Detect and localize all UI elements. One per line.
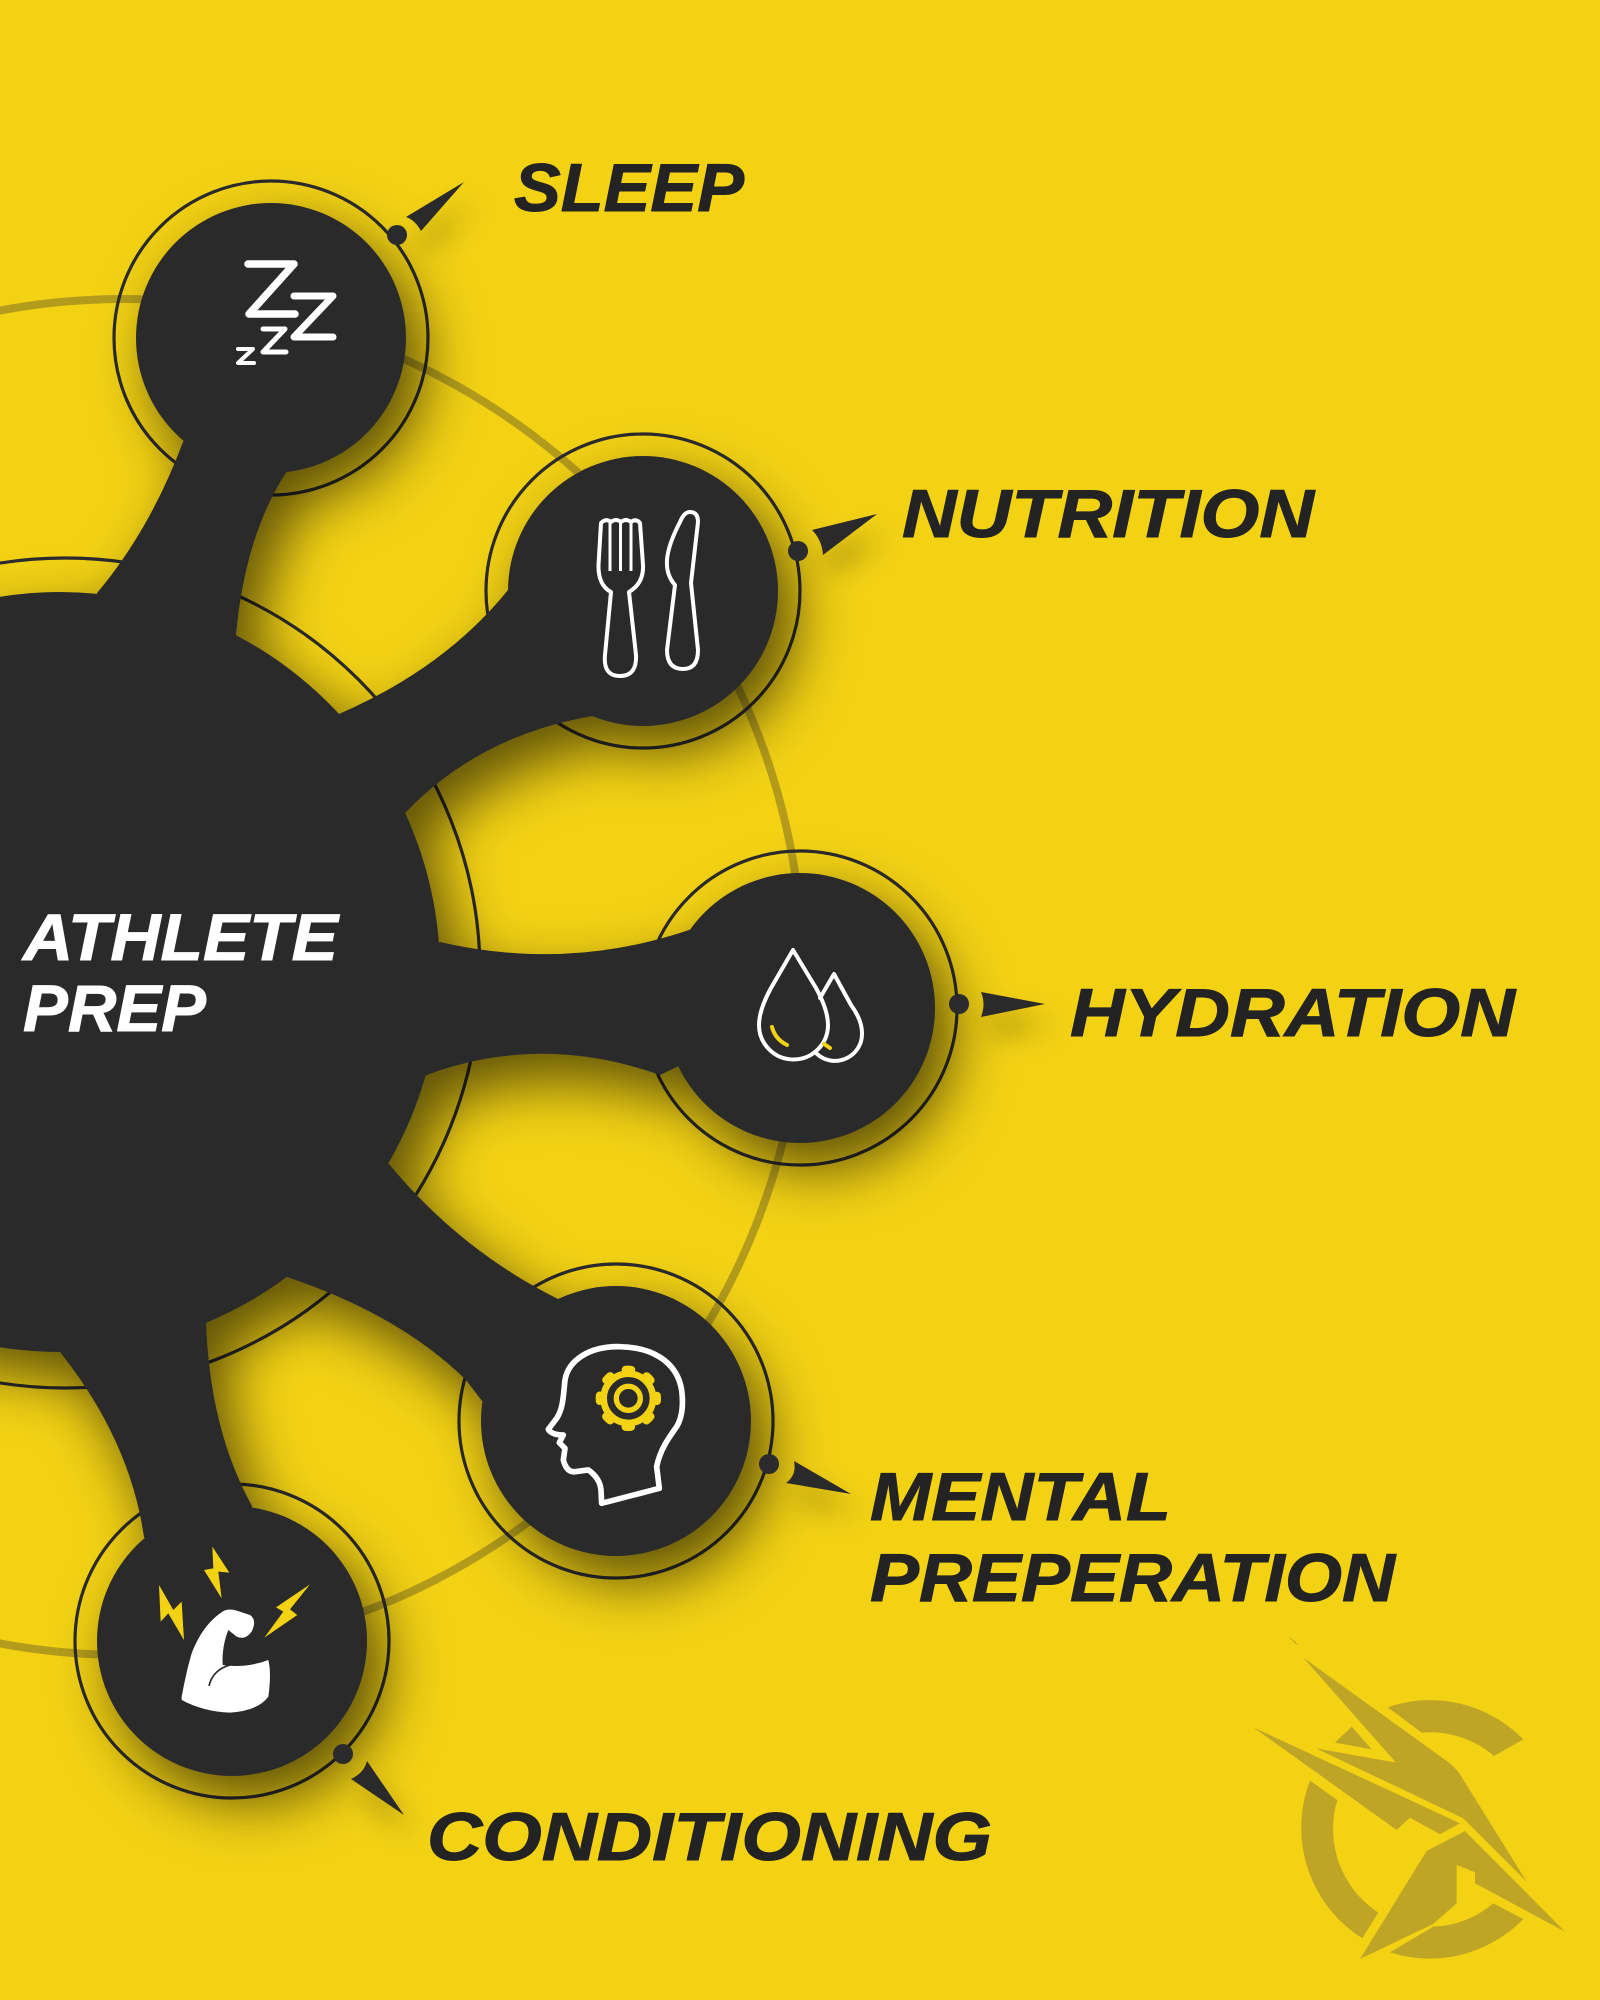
node: hydration [665, 873, 935, 1143]
hub and spokes dark shape [0, 203, 935, 1776]
watermark logo [1253, 1636, 1565, 1959]
spoke: hydration [300, 928, 800, 1076]
spoke: conditioning [60, 1200, 252, 1641]
label: sleep: SLEEP [514, 150, 745, 226]
icon: flexed arm with bolts [159, 1547, 310, 1713]
spoke: sleep [97, 338, 287, 800]
node: mental preparation [481, 1286, 751, 1556]
dot: sleep [387, 225, 407, 245]
ring: hydration [643, 851, 957, 1165]
ring: sleep [114, 181, 428, 495]
node: sleep [136, 203, 406, 473]
dot: hydration [949, 994, 969, 1014]
arrow: hydration [981, 992, 1045, 1017]
label: hydration: HYDRATION [1070, 975, 1517, 1051]
centre title: PREP [23, 971, 207, 1045]
ring: mental preparation [459, 1264, 773, 1578]
icon: sleep zzz [238, 264, 333, 363]
label: conditioning: CONDITIONING [427, 1799, 992, 1875]
head outline [548, 1347, 682, 1503]
centre title: ATHLETE [21, 900, 340, 974]
dot: mental preparation [759, 1454, 779, 1474]
label: mental preperation: PREPERATION [870, 1540, 1397, 1616]
arrow: nutrition [812, 514, 877, 555]
icon: water drops [759, 950, 862, 1061]
node: conditioning [97, 1506, 367, 1776]
node: nutrition [508, 456, 778, 726]
arm [182, 1609, 270, 1713]
lightning bolts [159, 1547, 310, 1640]
ring: centre [0, 558, 480, 1388]
spoke: mental preparation [250, 1100, 616, 1421]
arm crease [209, 1665, 230, 1686]
outline rings [0, 181, 957, 1798]
arrow: sleep [406, 182, 464, 231]
connector dots [333, 225, 969, 1764]
spoke: nutrition [300, 590, 643, 900]
faint orbit arc [0, 299, 803, 1655]
labels [427, 150, 1517, 1875]
ring: nutrition [486, 434, 800, 748]
centre title [21, 900, 340, 1045]
arrow: conditioning [351, 1761, 404, 1815]
label: mental preperation: MENTAL [870, 1459, 1171, 1535]
dot: nutrition [788, 541, 808, 561]
dot: conditioning [333, 1744, 353, 1764]
icon: fork and knife [598, 512, 698, 676]
label: mental preperation [870, 1459, 1397, 1616]
arrow: mental preparation [786, 1461, 851, 1494]
gear [600, 1370, 657, 1427]
icon: head with gear [548, 1347, 682, 1503]
label: nutrition: NUTRITION [902, 476, 1316, 552]
ring: conditioning [75, 1484, 389, 1798]
pointer arrows [351, 182, 1045, 1815]
central hub [0, 592, 440, 1352]
